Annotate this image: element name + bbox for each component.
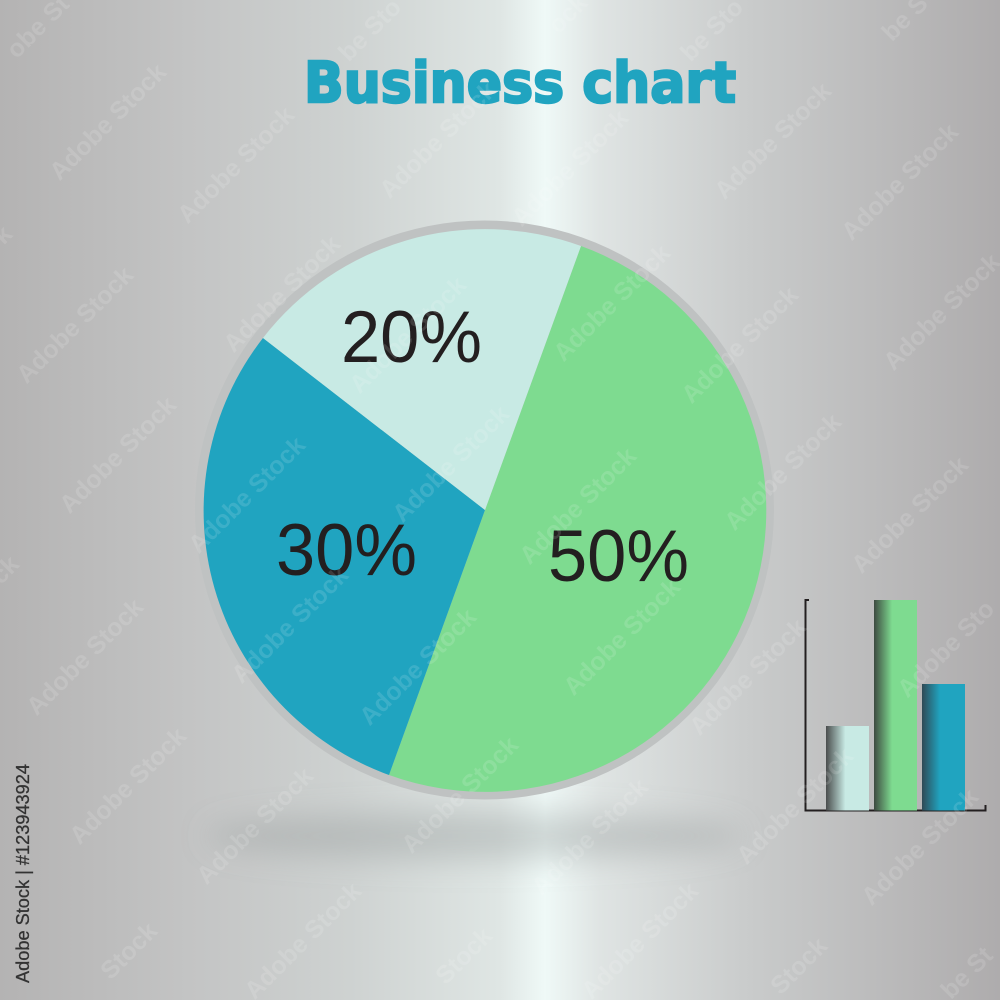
watermarks: Adobe Stock	[846, 451, 974, 579]
watermarks: Stock	[765, 932, 833, 1000]
watermarks: Stock	[95, 917, 163, 985]
small bar chart	[806, 600, 986, 810]
label: 30%: 30%	[276, 510, 417, 591]
watermarks: Adobe Stock	[676, 281, 804, 409]
pie shadow	[207, 812, 743, 860]
watermarks: Adobe Stock	[856, 783, 984, 911]
watermarks: Adobe Sto	[892, 595, 1000, 703]
title: Business chart	[304, 51, 736, 116]
watermarks: Adobe Stock	[684, 613, 812, 741]
label: 20%: 20%	[341, 297, 482, 378]
watermarks: Adobe Stock	[21, 593, 149, 721]
watermarks: Adobe Stock	[218, 230, 346, 358]
watermarks: Adobe Stock	[344, 271, 472, 399]
bar: blue	[922, 684, 965, 810]
watermarks: Adobe Stock	[506, 104, 634, 232]
watermarks: Adobe Stock	[44, 58, 172, 186]
label: 50%: 50%	[548, 516, 689, 597]
watermarks: Adobe Stock	[731, 742, 859, 870]
axes	[806, 600, 986, 810]
pie chart	[195, 220, 774, 800]
watermarks: Adobe Stock	[396, 731, 524, 859]
watermarks: Adobe Stock	[54, 391, 182, 519]
watermarks: Adobe Stock	[226, 561, 354, 689]
watermarks: Adobe Stock	[191, 762, 319, 890]
watermarks: Adobe Stock	[11, 261, 139, 389]
watermarks: Adobe Stock	[387, 400, 515, 528]
watermarks: Adobe Stock	[514, 442, 642, 570]
watermarks: Adobe Stock	[64, 722, 192, 850]
pie outer ring	[195, 220, 774, 800]
watermarks: Adobe Stock	[183, 431, 311, 559]
watermarks: Adobe Stock	[709, 77, 837, 205]
watermarks: Adobe Stock	[548, 239, 676, 367]
watermarks: Adobe Stock	[719, 408, 847, 536]
watermarks: Adobe Stock	[172, 101, 300, 229]
slice: 50% green	[389, 246, 766, 792]
watermarks: Adobe Stock	[354, 603, 482, 731]
watermarks: Adobe Stock	[836, 118, 964, 246]
bar: green	[874, 600, 917, 810]
slice: 30% blue	[204, 338, 485, 775]
watermarks: Stock	[430, 922, 498, 990]
bar: pale	[826, 726, 869, 810]
watermarks: Adobe Stock	[558, 573, 686, 701]
watermarks: Adobe Stock	[374, 76, 502, 204]
stock id text: Adobe Stock | #123943924	[13, 764, 33, 983]
watermarks: Adobe Stock	[526, 773, 654, 901]
slice: 20% pale	[263, 229, 581, 510]
